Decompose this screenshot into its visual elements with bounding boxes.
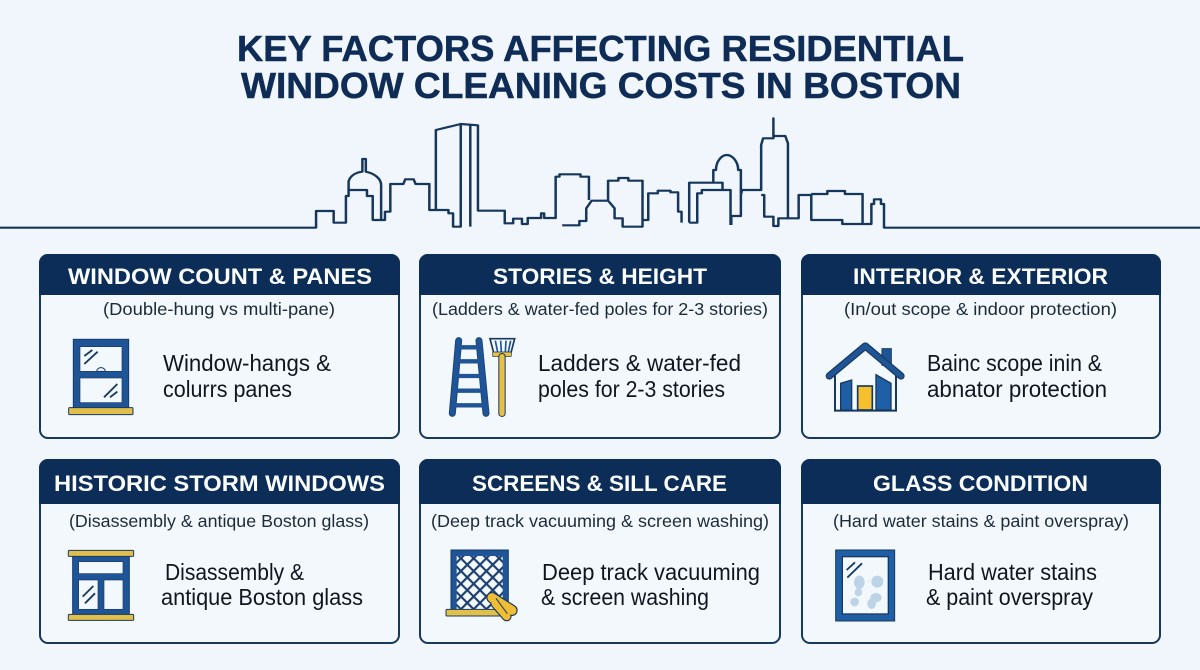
heading text: GLASS CONDITION <box>873 471 1088 496</box>
body text: Window-hangs & <box>163 350 331 376</box>
subheading: (Double-hung vs multi-pane) <box>103 299 335 319</box>
icon: stained glass pane <box>836 550 895 621</box>
header: interior and exterior <box>801 254 1161 295</box>
subheading: (Hard water stains & paint overspray) <box>833 511 1129 531</box>
body text <box>161 559 363 610</box>
heading text: SCREENS & SILL CARE <box>472 471 727 496</box>
body text: Ladders & water-fed <box>538 350 741 376</box>
title: KEY FACTORS AFFECTING RESIDENTIAL <box>237 28 964 69</box>
header: screens and sill care <box>419 459 781 504</box>
body text <box>163 350 331 402</box>
body text: poles for 2-3 stories <box>538 376 725 402</box>
body text: antique Boston glass <box>161 584 363 610</box>
header: window count and panes <box>39 254 400 295</box>
panel: interior and exterior <box>801 254 1161 438</box>
icon: house <box>829 346 901 411</box>
header: glass condition <box>801 459 1161 504</box>
body text: & paint overspray <box>926 584 1093 610</box>
heading text: INTERIOR & EXTERIOR <box>853 264 1108 289</box>
body text <box>927 350 1107 402</box>
body text: Disassembly & <box>165 559 304 585</box>
body text: colurrs panes <box>163 376 292 402</box>
subheading: (Ladders & water-fed poles for 2-3 stories) <box>432 299 768 319</box>
body text: Hard water stains <box>928 559 1097 585</box>
subheading: (In/out scope & indoor protection) <box>844 299 1117 319</box>
icon: ladder and brush pole <box>452 339 515 413</box>
body text: Deep track vacuuming <box>542 559 760 585</box>
panel: glass condition <box>801 459 1161 643</box>
body text: abnator protection <box>927 376 1107 402</box>
body text <box>538 350 741 402</box>
title: WINDOW CLEANING COSTS IN BOSTON <box>241 65 961 106</box>
panel: stories and height <box>419 254 781 438</box>
heading text: HISTORIC STORM WINDOWS <box>54 471 385 496</box>
body text <box>926 559 1097 610</box>
panel: screens and sill care <box>419 459 781 643</box>
icon: double-hung window <box>69 339 133 415</box>
body text <box>541 559 760 610</box>
body text: & screen washing <box>541 584 709 610</box>
subheading: (Disassembly & antique Boston glass) <box>69 511 369 531</box>
panel: historic storm windows <box>39 459 400 643</box>
subheading: (Deep track vacuuming & screen washing) <box>431 511 769 531</box>
title <box>237 28 964 106</box>
header: stories and height <box>419 254 781 295</box>
panel: window count and panes <box>39 254 400 438</box>
body text: Bainc scope inin & <box>927 350 1102 376</box>
Boston skyline line drawing <box>0 118 1200 228</box>
icon: window screen and cloth <box>446 550 512 616</box>
heading text: WINDOW COUNT & PANES <box>68 264 372 289</box>
heading text: STORIES & HEIGHT <box>493 264 707 289</box>
icon: historic window <box>68 550 134 620</box>
header: historic storm windows <box>39 459 400 504</box>
